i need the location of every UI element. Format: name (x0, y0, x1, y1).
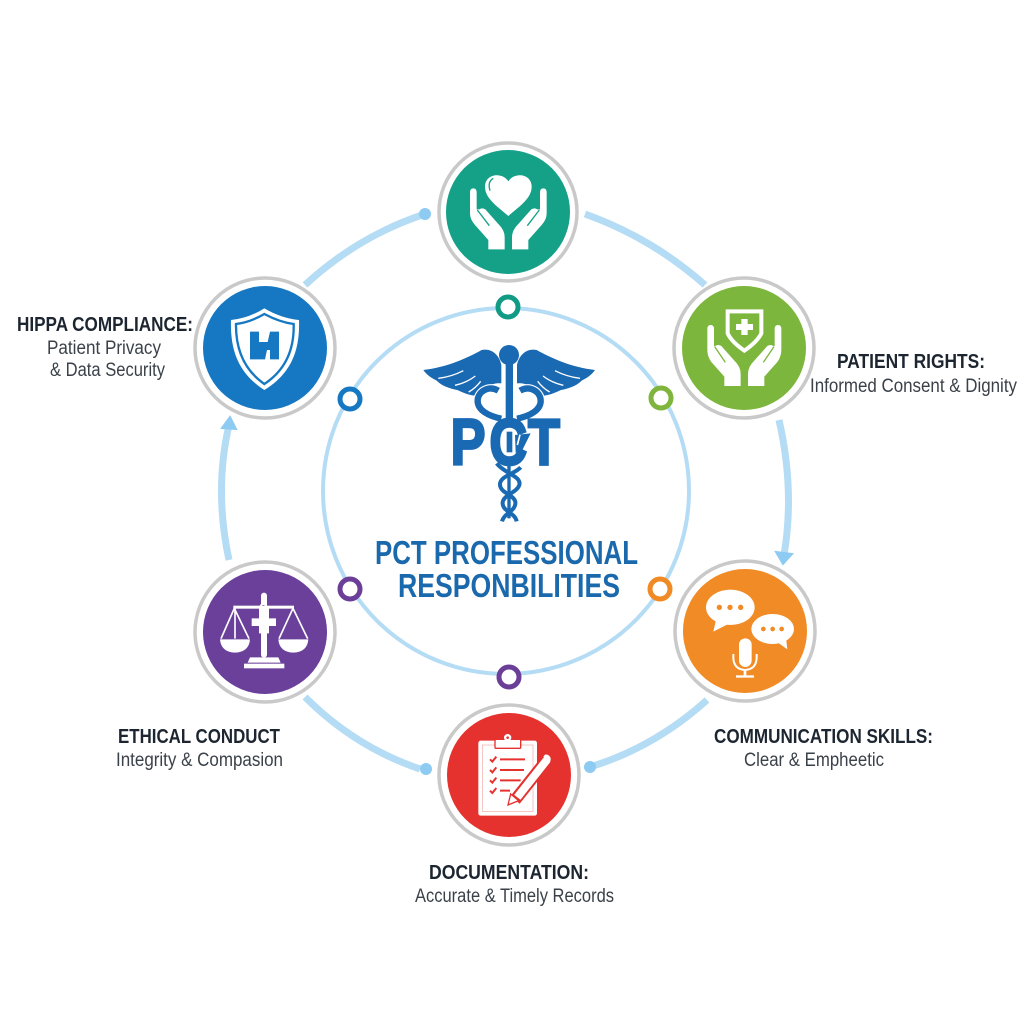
label: patient rights (810, 350, 1017, 397)
label: ethical conduct (116, 725, 283, 771)
label: HIPPA compliance: HIPPA COMPLIANCE: (17, 313, 193, 336)
label: documentation: Accurate & Timely Records (415, 886, 614, 907)
ring markers (340, 297, 671, 687)
title: RESPONBILITIES (398, 567, 620, 604)
icon: HIPAA shield (195, 278, 335, 418)
outer cycle arrows (222, 208, 792, 775)
label: communication skills (714, 725, 933, 771)
icon: patient rights shield in hands (674, 278, 814, 418)
icon: patient care heart in hands (439, 143, 577, 281)
inner ring (323, 308, 689, 674)
label: documentation (415, 861, 614, 907)
label: ethical conduct: ETHICAL CONDUCT (118, 725, 280, 748)
label: ethical conduct: Integrity & Compasion (116, 750, 283, 771)
title (375, 534, 638, 604)
title: PCT PROFESSIONAL (375, 534, 638, 571)
text: PCT: PCT (451, 405, 560, 479)
label: HIPPA compliance: Patient Privacy (47, 338, 161, 359)
icon: documentation clipboard and pen (439, 705, 579, 845)
label: HIPPA compliance: & Data Security (50, 360, 165, 381)
icon: ethical conduct scales (195, 562, 335, 702)
label: communication skills: COMMUNICATION SKILLS: (714, 725, 933, 748)
label: documentation: DOCUMENTATION: (429, 861, 589, 884)
label: patient rights: PATIENT RIGHTS: (837, 350, 985, 373)
label: HIPPA compliance (17, 313, 193, 381)
icon: caduceus PCT logo (423, 345, 595, 521)
label: communication skills: Clear & Empheetic (744, 750, 884, 771)
icon: communication speech bubbles and microphone (675, 561, 815, 701)
